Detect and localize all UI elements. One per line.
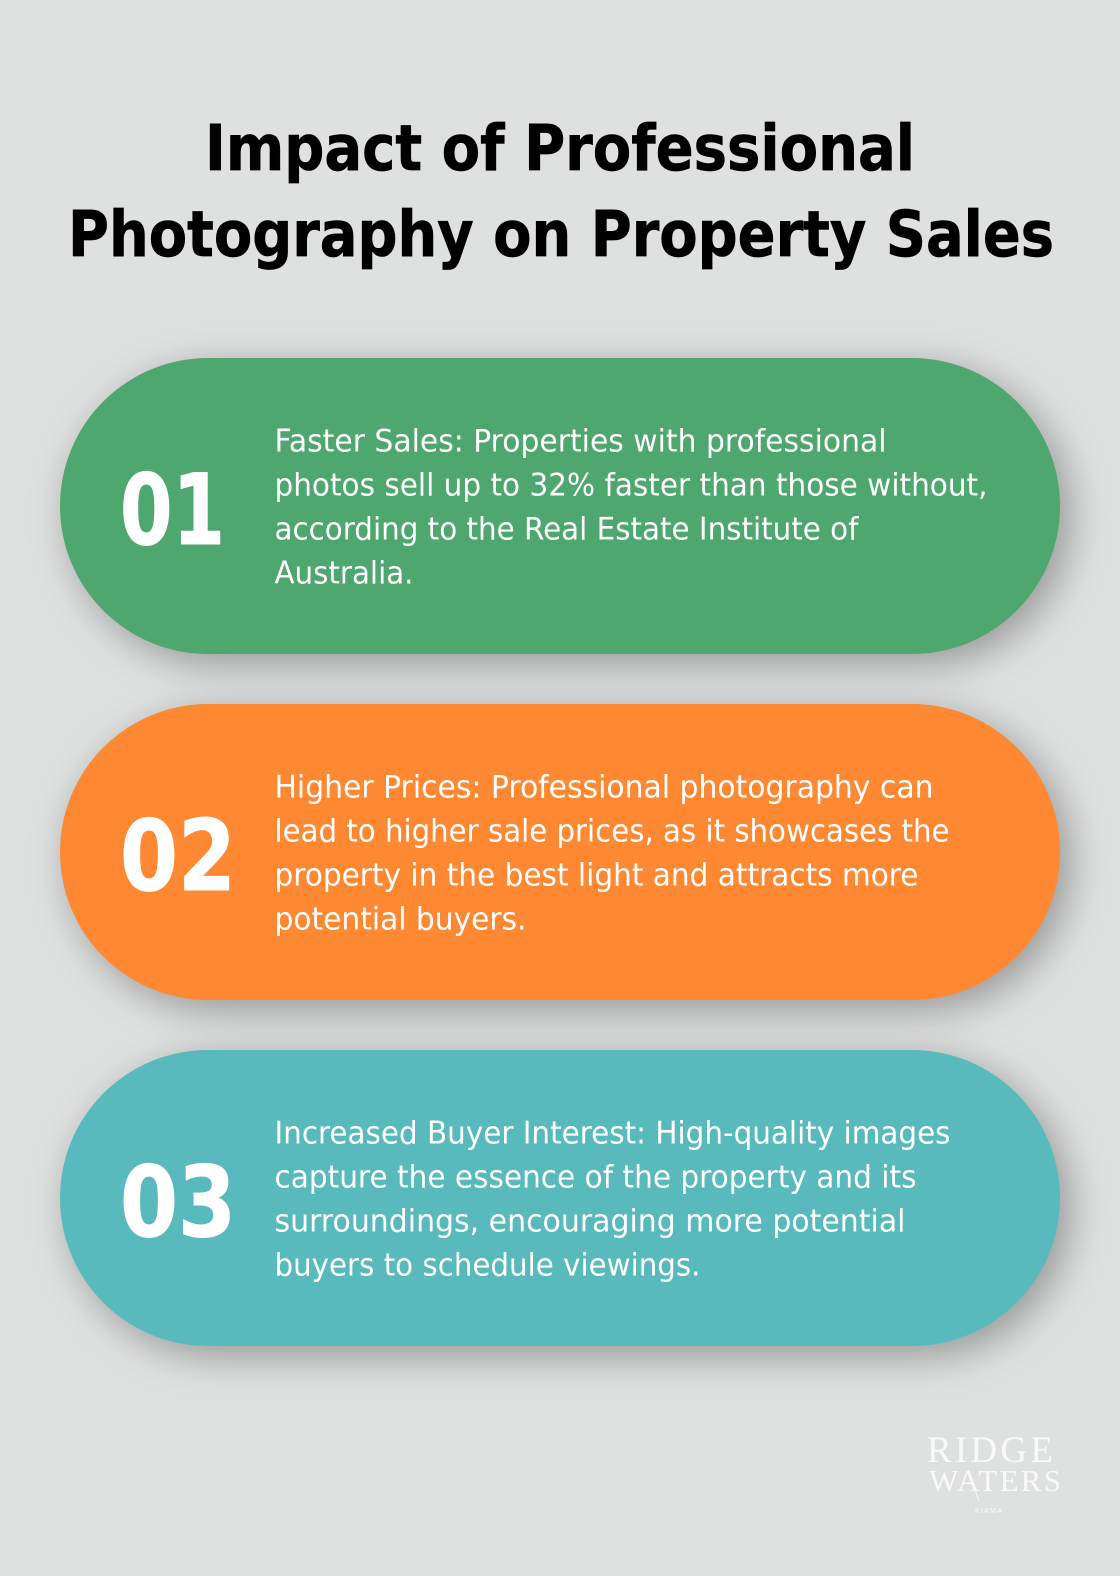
text: faster sales: according to the Real Estate Institute of [274, 512, 860, 548]
title: Impact of Professional [205, 112, 915, 185]
panel: increased buyer interest [60, 1050, 1070, 1356]
text: higher prices [274, 770, 950, 938]
logo: Ridge Waters Kiama [927, 1430, 1061, 1515]
number 01: 01 [120, 454, 225, 568]
text: increased buyer interest: Increased Buyer Interest: High-quality images [274, 1116, 950, 1152]
text: faster sales: Faster Sales: Properties with professional [274, 424, 886, 460]
text: increased buyer interest: capture the essence of the property and its [274, 1160, 916, 1196]
text: increased buyer interest: surroundings, encouraging more potential [274, 1204, 906, 1240]
text: increased buyer interest [274, 1116, 950, 1284]
text: higher prices: Higher Prices: Professional photography can [274, 770, 934, 806]
number 02: 02 [120, 800, 236, 914]
text: higher prices: lead to higher sale prices, as it showcases the [274, 814, 950, 850]
title [68, 112, 1054, 271]
panel: higher prices [60, 704, 1070, 1010]
logo: Ridge Waters Kiama: RIDGE [927, 1430, 1053, 1471]
panel: faster sales [60, 358, 1070, 664]
text: higher prices: property in the best light and attracts more [274, 858, 918, 894]
text: faster sales: Australia. [274, 556, 414, 592]
text: faster sales [274, 424, 988, 592]
number 03: 03 [120, 1146, 236, 1260]
text: increased buyer interest: buyers to schedule viewings. [274, 1248, 700, 1284]
logo: Ridge Waters Kiama: KIAMA [975, 1506, 1002, 1515]
text: faster sales: photos sell up to 32% faster than those without, [274, 468, 988, 504]
logo: Ridge Waters Kiama: WATERS [929, 1463, 1061, 1498]
text: higher prices: potential buyers. [274, 902, 526, 938]
